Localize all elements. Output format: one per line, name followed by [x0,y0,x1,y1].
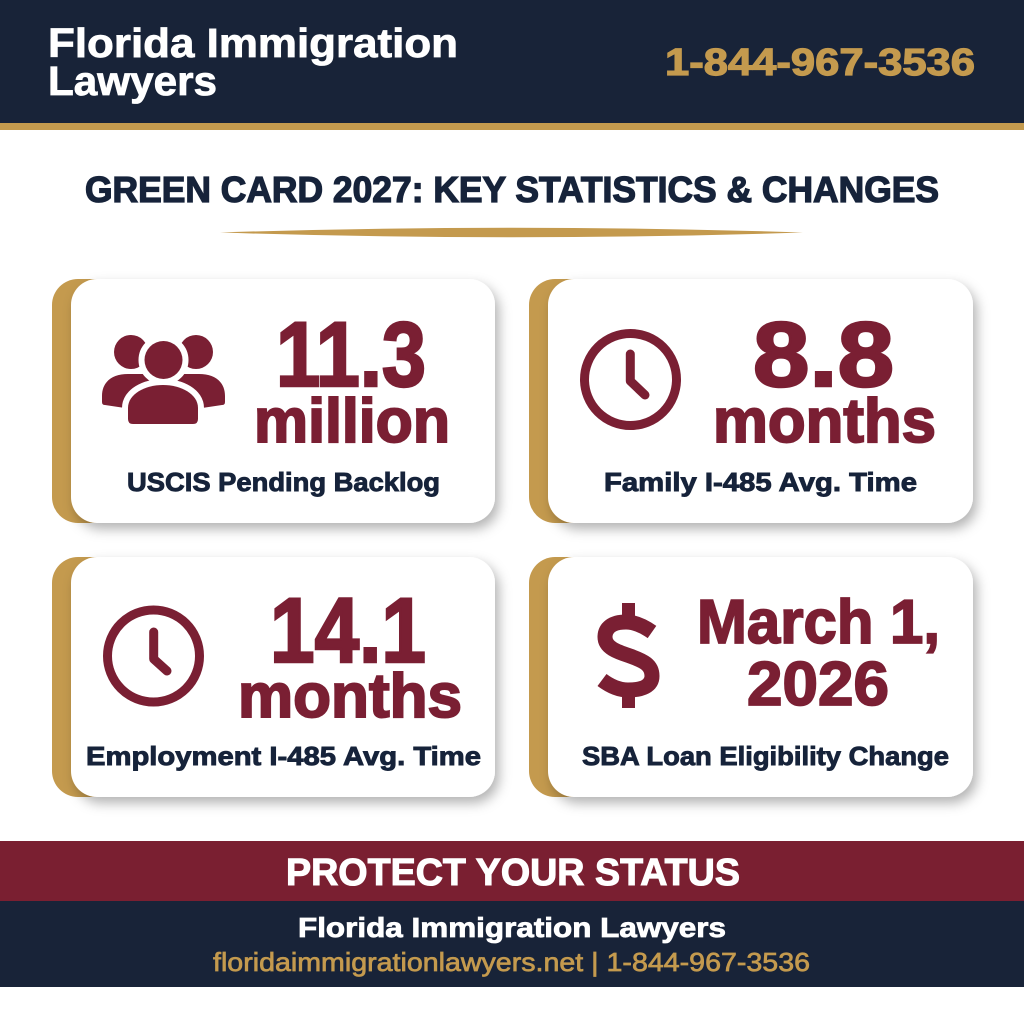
stat value: 14.1 [270,580,426,682]
stat value [254,304,450,456]
stat label: SBA Loan Eligibility Change [582,741,949,771]
header banner [0,0,1024,130]
footer call to action [0,841,1024,901]
footer contact [0,901,1024,987]
stat value [697,588,940,719]
icon: clock [108,610,200,702]
panel: SBA loan [529,557,973,797]
panel: employment I-485 [52,557,495,797]
icon: clock [584,334,676,426]
stat value: 11.3 [276,304,426,406]
firm name: Lawyers [48,58,217,104]
footer website and phone: floridaimmigrationlawyers.net | 1-844-967-3536 [213,947,810,977]
icon: people [102,335,225,424]
footer call to action: PROTECT YOUR STATUS [286,852,740,894]
title underline [220,228,803,237]
firm name: Florida Immigration [48,20,458,66]
stat label: USCIS Pending Backlog [127,467,440,497]
stat value: months [238,662,462,731]
stat value: March 1, [697,588,940,657]
stat value: 8.8 [753,304,894,406]
title: GREEN CARD 2027: KEY STATISTICS & CHANGES [85,169,939,210]
stat value [238,580,462,731]
icon: dollar sign [602,603,652,708]
stat label: Family I-485 Avg. Time [604,467,917,497]
firm name [48,20,458,104]
panel: family I-485 [529,279,973,523]
stat value [713,304,936,456]
stat value: 2026 [747,650,889,719]
panel: USCIS backlog [52,279,495,523]
phone number: 1-844-967-3536 [665,42,975,84]
footer firm name: Florida Immigration Lawyers [298,912,726,943]
stat value: months [713,387,936,456]
stat label: Employment I-485 Avg. Time [86,741,481,771]
stat value: million [254,387,450,456]
